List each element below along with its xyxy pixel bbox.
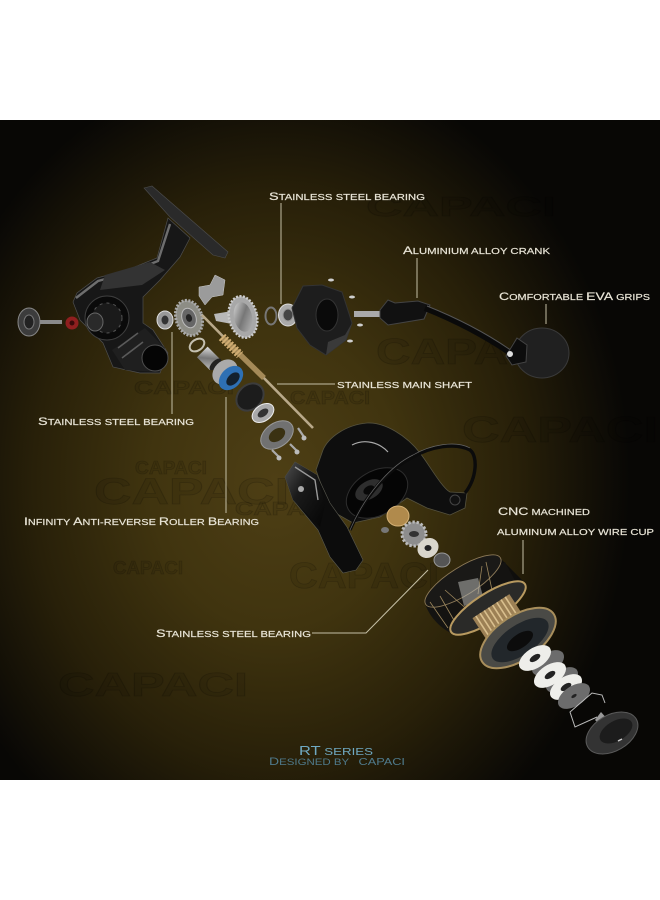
part: rotor arm and body (73, 186, 228, 373)
label: aluminum alloy wire cup: ALUMINUM ALLOY WIRE CUP (497, 527, 654, 537)
CAPACI watermarks: CAPACI (366, 191, 556, 222)
part: bail wire (350, 444, 475, 530)
part: EVA grip knob (506, 328, 569, 378)
part: side cover with screws (292, 278, 363, 355)
part: bearing and large gear (157, 297, 207, 339)
part: main reel body (285, 423, 467, 573)
label: infinity anti-reverse roller bearing: INFINITY ANTI-REVERSE ROLLER BEARING (24, 516, 259, 528)
label: aluminium alloy crank: A LUMINIUM ALLOY CRANK (403, 245, 550, 257)
part: main shaft with gold worm (202, 315, 313, 428)
CAPACI watermarks: CAPACI (135, 458, 207, 478)
CAPACI watermarks: CAPACI (462, 409, 658, 450)
part: pinion gear (214, 294, 261, 340)
CAPACI watermarks: CAPACI (134, 378, 234, 398)
part: aluminium crank arm (354, 300, 512, 354)
part: wire clip (570, 693, 605, 727)
CAPACI watermarks: CAPACI (58, 666, 248, 703)
label: CNC machined: CNC MACHINED (498, 506, 590, 518)
CAPACI watermarks (58, 191, 658, 703)
CAPACI watermarks: CAPACI (290, 388, 370, 408)
part: washer, sleeve, blue roller bearing (187, 336, 248, 395)
part: washer and bearing (266, 304, 298, 326)
dark gold background panel (0, 120, 660, 780)
part: drag knob (579, 703, 645, 763)
CAPACI watermarks: CAPACI (113, 558, 183, 578)
part: ratchet, bearing, plate, screws (231, 378, 306, 460)
CAPACI watermarks: CAPACI (94, 471, 289, 512)
part: gold nut, gear, washer, small bearing (381, 506, 450, 567)
part: bracket (199, 275, 225, 305)
label: stainless steel bearing top: S TAINLESS STEEL BEARING (269, 191, 425, 203)
label: stainless steel bearing left: S TAINLESS STEEL BEARING (38, 416, 194, 428)
part: CNC aluminum wire cup spool (418, 546, 566, 680)
label: comfortable EVA grips: COMFORTABLE EVA GRIPS (499, 291, 650, 303)
part: drag washers (514, 640, 595, 714)
part: left knob, screw and red ring (18, 308, 78, 336)
CAPACI watermarks: CAPA (235, 499, 305, 519)
CAPACI watermarks: CAPACI (376, 331, 556, 372)
label: stainless steel bearing bottom: S TAINLESS STEEL BEARING (156, 628, 311, 640)
label: RT series: RT SERIES (299, 743, 373, 758)
label: stainless main shaft: STAINLESS MAIN SHAFT (337, 380, 473, 390)
label: designed by CAPACI: DESIGNED BY CAPACI (269, 756, 405, 768)
CAPACI watermarks: CAPACI (289, 555, 439, 596)
leader lines (172, 203, 546, 633)
